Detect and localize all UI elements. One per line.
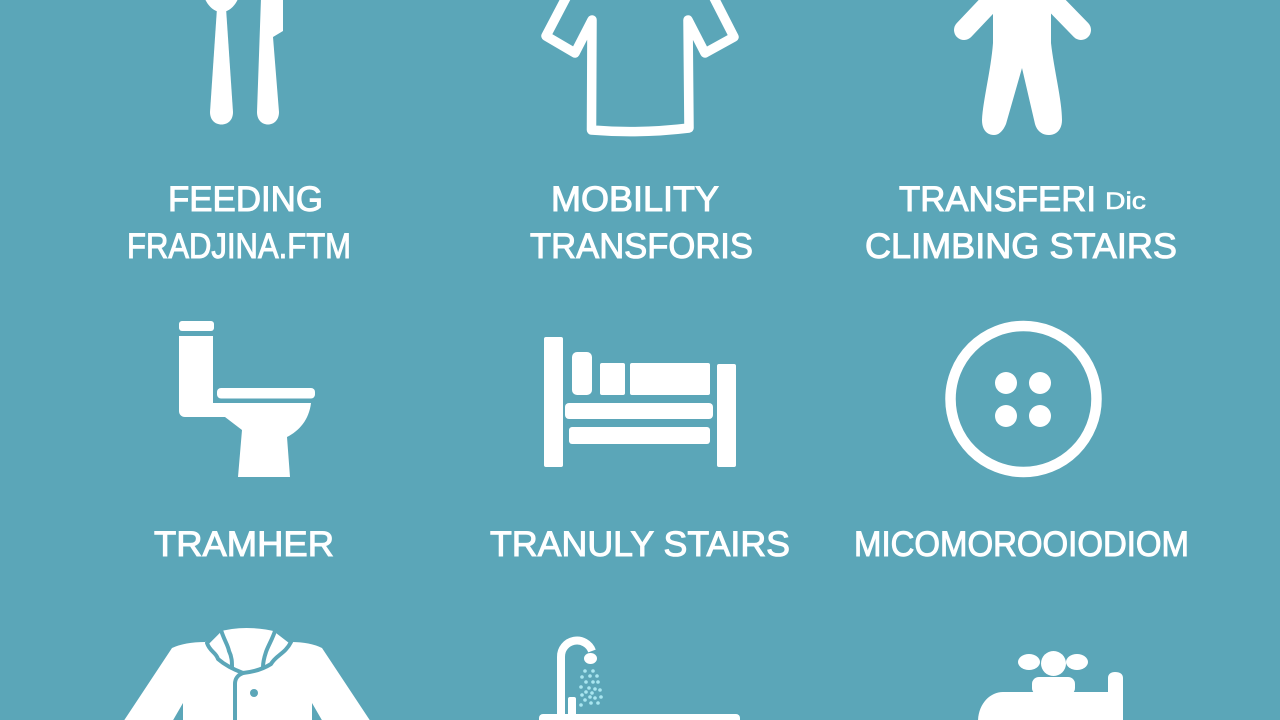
icon: t-shirt bbox=[546, 0, 734, 132]
label: tranuly stairs: TRANULY STAIRS bbox=[490, 525, 790, 564]
icon: bed bbox=[544, 337, 736, 467]
label: micomorooiodiom: MICOMOROOIODIOM bbox=[854, 525, 1189, 564]
label: feeding bbox=[127, 180, 351, 266]
icon: button bbox=[950, 326, 1096, 472]
label: transfer climbing stairs: Dic bbox=[1105, 188, 1146, 215]
label: transfer climbing stairs bbox=[865, 180, 1177, 266]
icon: bathtub tap bbox=[978, 651, 1123, 720]
label: mobility: MOBILITY bbox=[551, 180, 719, 219]
icon: jacket bbox=[123, 628, 371, 720]
label: feeding: FRADJINA.FTM bbox=[127, 227, 351, 266]
icon: toilet bbox=[179, 321, 315, 477]
icon: standing person bbox=[964, 0, 1081, 135]
icon: faucet and sink bbox=[539, 641, 740, 720]
label: feeding: FEEDING bbox=[168, 180, 323, 219]
label: tramher: TRAMHER bbox=[154, 525, 334, 564]
label: mobility: TRANSFORIS bbox=[530, 227, 753, 266]
label: transfer climbing stairs: TRANSFERI bbox=[899, 180, 1096, 219]
icon: spoon and knife bbox=[202, 0, 283, 124]
label: mobility bbox=[530, 180, 753, 266]
label: transfer climbing stairs: CLIMBING STAIRS bbox=[865, 227, 1177, 266]
